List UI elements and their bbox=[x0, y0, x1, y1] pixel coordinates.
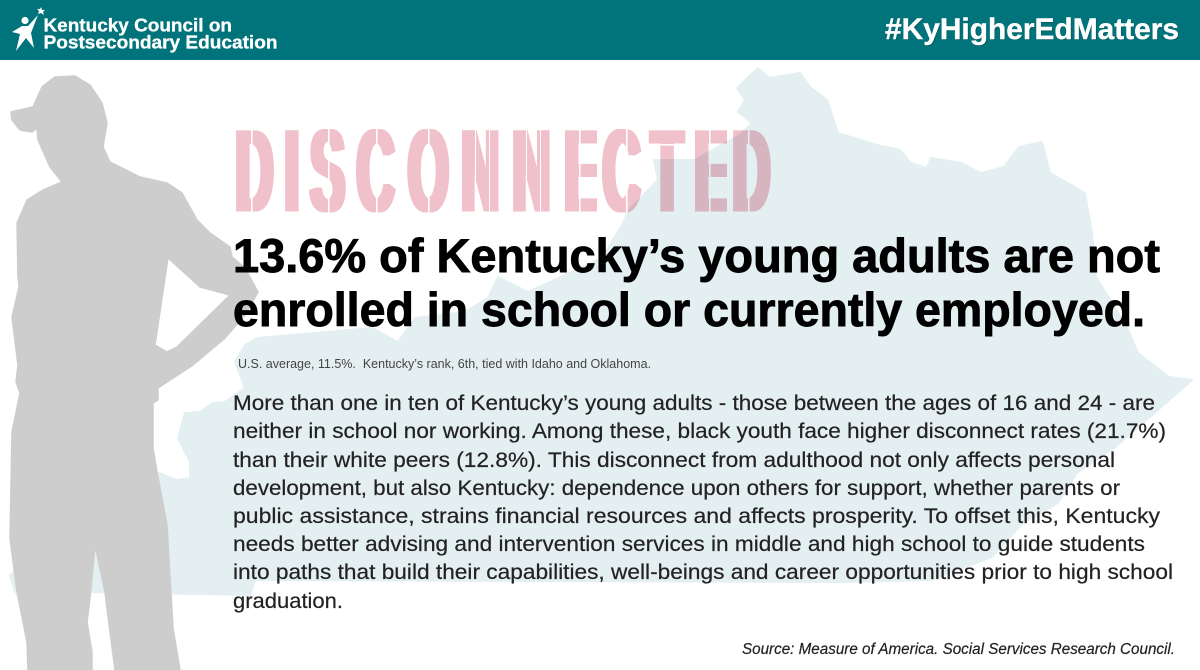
main heading: 13.6% of Kentucky’s young adults are not bbox=[233, 229, 1160, 282]
body paragraph: development, but also Kentucky: dependence upon others for support, whether parents or bbox=[233, 477, 1120, 500]
body paragraph: neither in school nor working. Among these, black youth face higher disconnect rates (21.7%) bbox=[233, 420, 1166, 443]
sub-note: U.S. average and rank: U.S. average, 11.5%. Kentucky’s rank, 6th, tied with Idaho and Oklahoma. bbox=[238, 356, 651, 371]
body paragraph: graduation. bbox=[233, 590, 343, 613]
hashtag: #KyHigherEdMatters bbox=[886, 14, 1180, 47]
body paragraph: needs better advising and intervention services in middle and high school to guide students bbox=[233, 533, 1145, 556]
logo wordmark: Kentucky Council on bbox=[44, 14, 232, 36]
body paragraph: More than one in ten of Kentucky’s young adults - those between the ages of 16 and 24 - are bbox=[233, 392, 1155, 415]
hashtag: #KyHigherEdMatters bbox=[885, 13, 1179, 46]
logo wordmark: Postsecondary Education bbox=[44, 32, 278, 52]
source line: Source: Measure of America. Social Services Research Council. bbox=[742, 641, 1175, 658]
header bar bbox=[0, 0, 1200, 60]
body paragraph: than their white peers (12.8%). This disconnect from adulthood not only affects personal bbox=[233, 449, 1115, 472]
stencil word: DISCONNECTED: DISCONNECTED bbox=[236, 105, 770, 237]
main heading bbox=[233, 229, 1160, 336]
main heading: enrolled in school or currently employed. bbox=[233, 283, 1145, 336]
body paragraph: public assistance, strains financial resources and affects prosperity. To offset this, Kentucky bbox=[233, 505, 1161, 528]
logo wordmark bbox=[44, 14, 278, 52]
background map: Kentucky bbox=[10, 68, 1192, 595]
body paragraph bbox=[233, 392, 1173, 613]
logo: star figure bbox=[12, 7, 45, 51]
silhouette: man with cap bbox=[10, 76, 258, 670]
body paragraph: into paths that build their capabilities, well-beings and career opportunities prior to high school bbox=[233, 561, 1173, 584]
